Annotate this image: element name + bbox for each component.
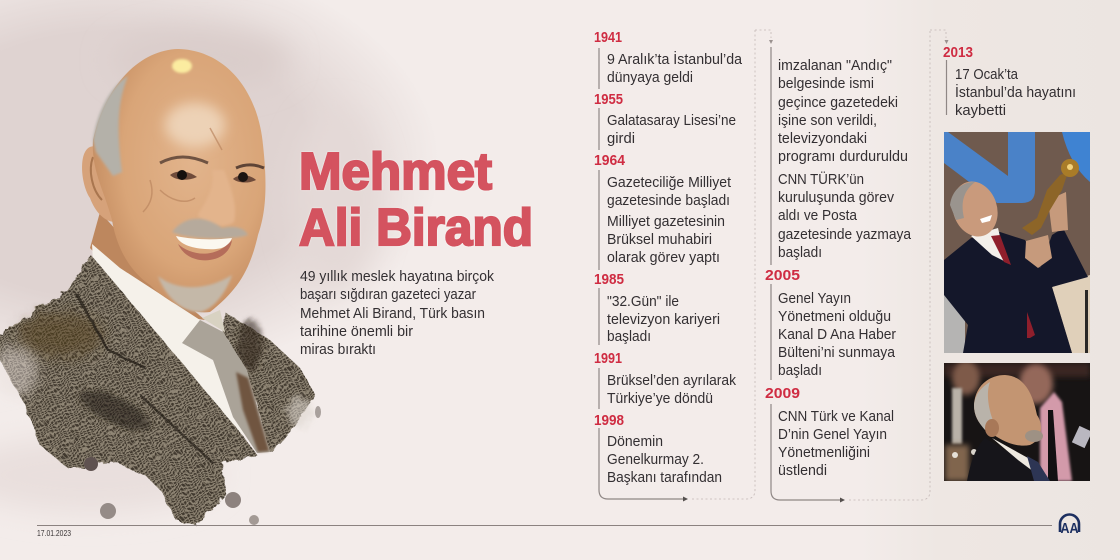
entry 1998 continued: [778, 58, 912, 261]
entry 1941: 9 Aralık’ta İstanbul’da: [607, 50, 743, 68]
hands: [1025, 192, 1068, 268]
entry 2005: Bülteni’ni sunmaya: [778, 345, 896, 361]
icon: AA logo: AA: [1060, 521, 1079, 537]
entry 2005: Genel Yayın: [778, 291, 851, 307]
entry 2013: kaybetti: [955, 103, 1006, 119]
entry 2009: üstlendi: [778, 463, 827, 479]
timeline column 3: [930, 30, 1076, 119]
entry 1955: [594, 91, 736, 147]
entry 2009: D’nin Genel Yayın: [778, 427, 887, 443]
entry 1964: Milliyet gazetesinin: [607, 214, 725, 230]
shirt: [971, 228, 1006, 262]
hair: [950, 182, 975, 220]
entry 1985: "32.Gün" ile: [607, 294, 679, 310]
tie: [182, 310, 270, 453]
paint blots: [84, 406, 321, 525]
entry 1998: [594, 412, 722, 486]
entry 1964: Brüksel muhabiri: [607, 232, 712, 248]
shirt collar and front: [92, 244, 246, 436]
moustache: [172, 219, 248, 238]
neck: [90, 212, 205, 320]
suit: [967, 450, 977, 481]
entry 1964: gazetesinde başladı: [607, 193, 730, 209]
photo: holding the trophy: [944, 132, 1090, 353]
entry 2005: Kanal D Ana Haber: [778, 327, 896, 343]
head: [93, 49, 265, 312]
entry 1998 continued: imzalanan "Andıç": [778, 58, 892, 74]
head: [954, 182, 998, 236]
beard: [1025, 430, 1043, 442]
intro paragraph: 49 yıllık meslek hayatına birçok: [300, 269, 495, 285]
entry 1964: Gazeteciliğe Milliyet: [607, 175, 731, 191]
entry 1991: [594, 350, 737, 407]
footer line: [37, 525, 1052, 526]
timeline rails and connector: [599, 30, 755, 502]
entry 2013: 17 Ocak’ta: [955, 67, 1019, 83]
hair: [974, 382, 992, 430]
date: 17.01.2023: [37, 529, 71, 538]
tie: [991, 235, 1035, 338]
entry 1998 continued: işine son verildi,: [778, 113, 877, 129]
grey hair: [93, 76, 128, 176]
entry 1985: [594, 271, 720, 345]
lower lip: [178, 240, 232, 260]
entry 2009: CNN Türk ve Kanal: [778, 409, 894, 425]
collar and tie: [992, 438, 1031, 470]
title: Ali Birand: [299, 199, 533, 257]
scalp highlight: [172, 59, 192, 73]
entry 1941: dünyaya geldi: [607, 70, 693, 86]
intro paragraph: başarı sığdıran gazeteci yazar: [300, 287, 476, 303]
head: [974, 375, 1041, 446]
entry 2009: 2009: [765, 385, 800, 402]
entry 2013: İstanbul’da hayatını: [955, 83, 1076, 101]
portrait of Mehmet Ali Birand: [0, 49, 321, 526]
intro paragraph: miras bıraktı: [300, 342, 376, 358]
timeline rails and connector: [755, 30, 930, 502]
entry 1941: 1941: [594, 29, 622, 46]
timeline rail and connector: [930, 30, 948, 115]
trophy: [1022, 172, 1068, 235]
ear: [82, 146, 115, 222]
entry 2005: başladı: [778, 363, 822, 379]
ear: [985, 419, 999, 437]
entry 1955: Galatasaray Lisesi’ne: [607, 113, 736, 129]
entry 2009: [765, 385, 894, 479]
entry 1998 continued: belgesinde ismi: [778, 76, 874, 92]
jacket: [0, 256, 316, 526]
entry 1998: Dönemin: [607, 434, 663, 450]
entry 1998 continued: programı durduruldu: [778, 149, 908, 165]
entry 1998 continued: geçince gazetedeki: [778, 95, 898, 111]
blurred background guests: [944, 361, 1092, 481]
entry 1998: Genelkurmay 2.: [607, 452, 704, 468]
entry 1998 continued: televizyondaki: [778, 131, 867, 147]
forehead light: [165, 103, 225, 147]
title: Mehmet: [299, 143, 492, 201]
entry 1991: 1991: [594, 350, 622, 367]
entry 1964: [594, 152, 731, 266]
entry 1985: televizyon kariyeri: [607, 312, 720, 328]
entry 1998 continued: kuruluşunda görev: [778, 190, 895, 206]
entry 1985: 1985: [594, 271, 624, 288]
entry 2009: Yönetmenliğini: [778, 445, 870, 461]
entry 1941: [594, 29, 743, 86]
entry 1998 continued: CNN TÜRK’ün: [778, 170, 864, 188]
entry 1998 continued: başladı: [778, 245, 822, 261]
entry 2005: [765, 267, 896, 379]
intro paragraph: Mehmet Ali Birand, Türk basın: [300, 306, 485, 322]
intro paragraph: [300, 269, 495, 358]
intro paragraph: tarihine önemli bir: [300, 324, 413, 340]
entry 1964: olarak görev yaptı: [607, 250, 720, 266]
entry 2005: 2005: [765, 267, 800, 284]
eyes: [170, 170, 256, 183]
entry 2005: Yönetmeni olduğu: [778, 309, 891, 325]
entry 1955: girdi: [607, 131, 635, 147]
smile teeth: [176, 236, 232, 249]
photo: at a dinner: [944, 361, 1092, 481]
timeline column 1: [594, 29, 755, 502]
suit: [944, 228, 1088, 353]
entry 1985: başladı: [607, 329, 651, 345]
entry 1998 continued: aldı ve Posta: [778, 208, 858, 224]
wrinkles: [143, 128, 222, 212]
entry 1998 continued: gazetesinde yazmaya: [778, 227, 912, 243]
entry 2013: [943, 44, 1076, 119]
entry 1991: Türkiye’ye döndü: [607, 391, 713, 407]
icon: AA logo: [1060, 514, 1079, 537]
title: [299, 143, 533, 257]
entry 2013: 2013: [943, 44, 973, 61]
eyebrows: [160, 157, 264, 168]
nose: [198, 170, 235, 226]
smile: [980, 215, 992, 223]
entry 1955: 1955: [594, 91, 623, 108]
beard: [158, 275, 232, 312]
entry 1964: 1964: [594, 152, 626, 169]
timeline column 2: [755, 30, 930, 502]
entry 1998: Başkanı tarafından: [607, 470, 722, 486]
stage backdrop: [944, 132, 1035, 203]
entry 1998: 1998: [594, 412, 624, 429]
entry 1991: Brüksel’den ayrılarak: [607, 373, 737, 389]
